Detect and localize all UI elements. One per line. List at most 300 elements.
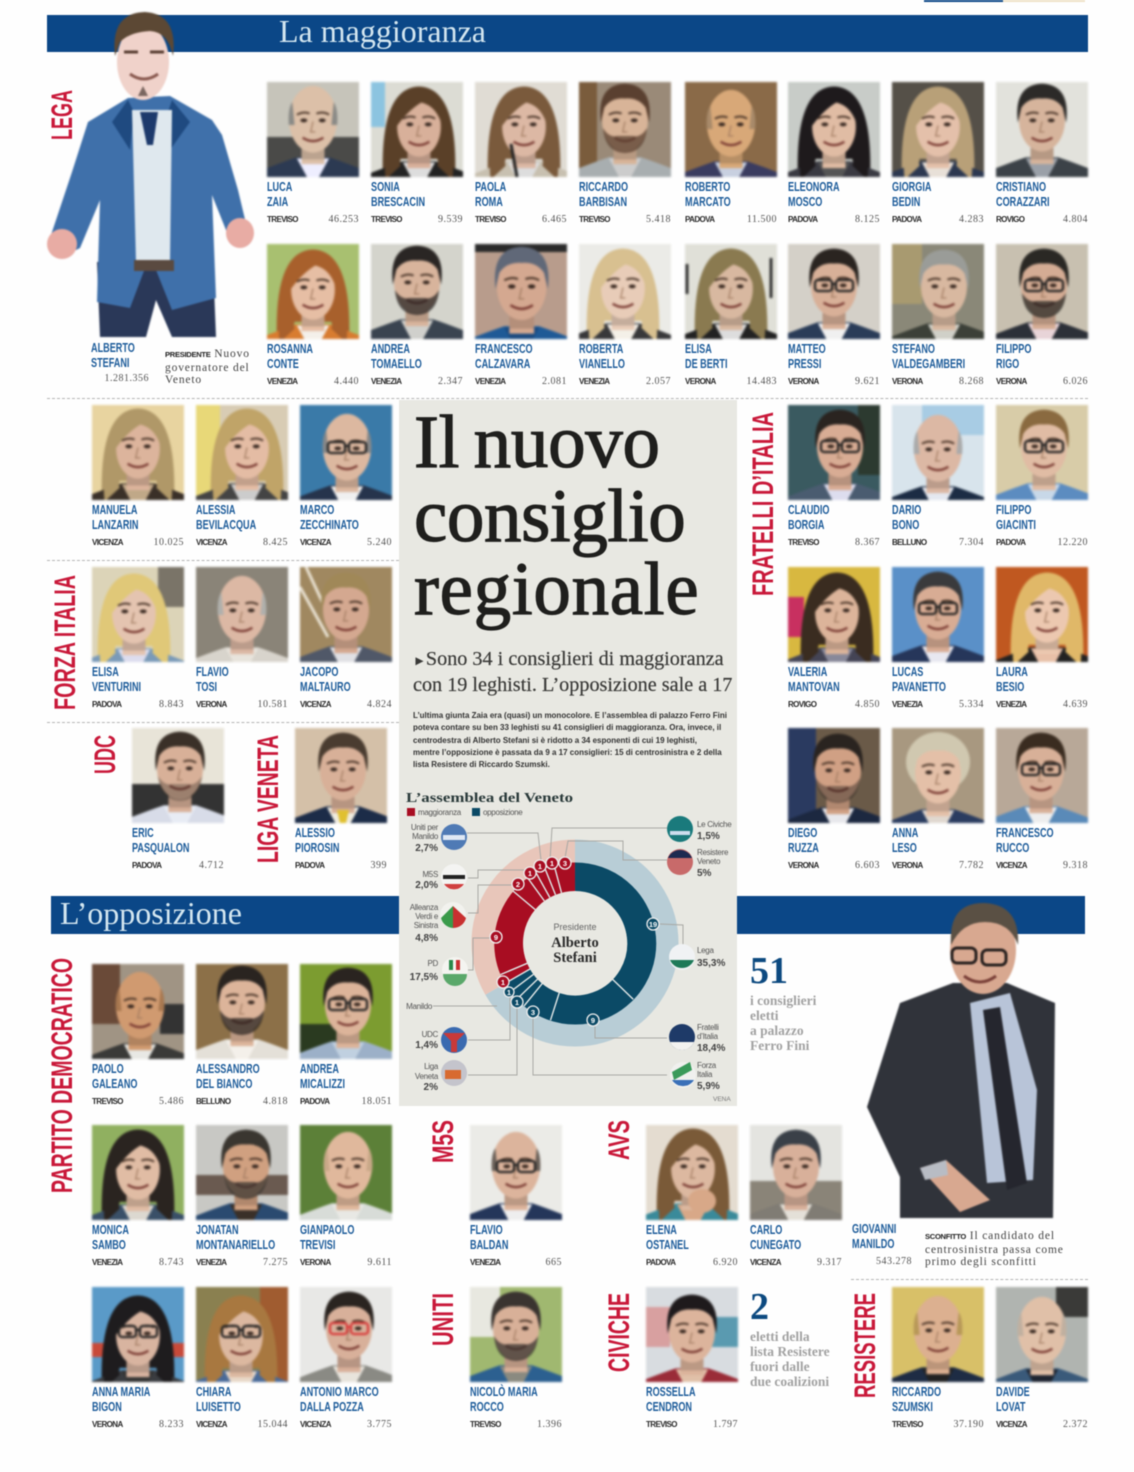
card: Lucas Pavanetto: LUCAS bbox=[892, 664, 923, 679]
callout text: Ferro Fini bbox=[750, 1038, 809, 1053]
card: Cristiano Corazzari: 4.804 bbox=[1063, 214, 1088, 225]
subtitle: ►Sono 34 i consiglieri di maggioranza bbox=[413, 648, 724, 670]
card: Jonatan Montanariello bbox=[196, 1125, 288, 1270]
header bar: La maggioranza bbox=[47, 15, 1088, 52]
card: Rossella Cendron: CENDRON bbox=[646, 1398, 692, 1414]
portrait bbox=[683, 80, 779, 179]
labels right: Resistere bbox=[697, 848, 729, 857]
party label: Resistere: RESISTERE bbox=[849, 1293, 882, 1398]
card: Gianpaolo Trevisi bbox=[300, 1125, 392, 1270]
card: Flavio Baldan: VENEZIA bbox=[470, 1258, 500, 1267]
labels right: Fratelli bbox=[697, 1023, 719, 1032]
chart: assemblea del Veneto: 19 bbox=[649, 920, 657, 929]
card: Alessio Piorosin: 399 bbox=[370, 860, 387, 871]
legend: maggioranza bbox=[418, 808, 462, 817]
labels left: 2% bbox=[424, 1082, 438, 1093]
card: Dario Bono: DARIO bbox=[892, 502, 921, 517]
card: Nicolò Maria Rocco: NICOLÒ MARIA bbox=[470, 1384, 538, 1399]
card: Diego Ruzza: RUZZA bbox=[788, 840, 819, 854]
card: Stefano Valdegamberi: VERONA bbox=[892, 377, 923, 386]
card: Roberto Marcato: MARCATO bbox=[685, 194, 731, 208]
chart: assemblea del Veneto: 1 bbox=[528, 869, 532, 878]
chart: assemblea del Veneto: 1 bbox=[550, 859, 554, 868]
Giovanni Manildo name block: MANILDO bbox=[852, 1236, 894, 1250]
card: Francesco Rucco: VICENZA bbox=[996, 861, 1027, 870]
caption: Stefani: PRESIDENTE Nuovo bbox=[165, 348, 250, 360]
card: Roberta Vianello: VIANELLO bbox=[579, 356, 625, 370]
card: Matteo Pressi: PRESSI bbox=[788, 356, 821, 370]
card: Laura Besio: LAURA bbox=[996, 664, 1028, 679]
card: Cristiano Corazzari: ROVIGO bbox=[996, 215, 1024, 224]
card: Dario Bono: 7.304 bbox=[959, 537, 984, 548]
card: Paola Roma: 6.465 bbox=[542, 214, 567, 225]
labels left: M5S bbox=[422, 870, 438, 879]
card: Elisa Venturini: VENTURINI bbox=[92, 678, 141, 694]
party label: Civiche: CIVICHE bbox=[603, 1293, 636, 1372]
card: Paola Roma: ROMA bbox=[475, 194, 503, 208]
card: Riccardo Szumski: SZUMSKI bbox=[892, 1398, 933, 1414]
card: Anna Maria Bigon bbox=[92, 1287, 184, 1432]
labels left: 17,5% bbox=[410, 972, 438, 983]
card: Francesco Rucco bbox=[996, 728, 1088, 873]
labels left: 2,7% bbox=[415, 843, 438, 854]
caption: Manildo: SCONFITTO Il candidato del bbox=[925, 1230, 1055, 1242]
card: Gianpaolo Trevisi: TREVISI bbox=[300, 1236, 335, 1252]
card: Anna Leso: ANNA bbox=[892, 825, 918, 840]
card: Antonio Marco Dalla Pozza: 3.775 bbox=[367, 1419, 392, 1430]
Giovanni Manildo name block: GIOVANNI bbox=[852, 1221, 896, 1236]
card: Elisa De Berti bbox=[683, 243, 779, 387]
card: Monica Sambo: SAMBO bbox=[92, 1236, 126, 1252]
card: Sonia Brescacin bbox=[369, 80, 465, 225]
card: Chiara Luisetto: 15.044 bbox=[258, 1419, 288, 1430]
labels right: Lega bbox=[697, 946, 714, 955]
Alberto Stefani name block: ALBERTO bbox=[91, 340, 135, 355]
chart: assemblea del Veneto: 3 bbox=[563, 859, 567, 868]
donut centre label: Stefani bbox=[553, 950, 597, 966]
card: Carlo Cunegato: VICENZA bbox=[750, 1258, 781, 1267]
labels right: Forza bbox=[697, 1061, 717, 1070]
card: Paola Roma: PAOLA bbox=[475, 179, 506, 194]
card: Roberta Vianello bbox=[577, 244, 673, 387]
card: Elisa De Berti: DE BERTI bbox=[685, 356, 727, 370]
card: Manuela Lanzarin: LANZARIN bbox=[92, 516, 139, 532]
intro text: centrodestra di Alberto Stefani si è ridotto a 34 esponenti di cui 19 leghisti, bbox=[413, 735, 697, 745]
card: Roberta Vianello: 2.057 bbox=[646, 376, 671, 387]
donut centre label: Presidente bbox=[553, 922, 597, 932]
party label: M5S: M5S bbox=[427, 1120, 460, 1163]
card: Filippo Giacinti: GIACINTI bbox=[996, 516, 1036, 532]
portrait bbox=[196, 1287, 288, 1382]
portrait bbox=[194, 403, 290, 502]
chart: assemblea del Veneto: 1 bbox=[507, 988, 511, 997]
portrait bbox=[646, 1125, 738, 1220]
card: Davide Lovat: DAVIDE bbox=[996, 1384, 1030, 1399]
leader lines bbox=[433, 828, 683, 1075]
portrait bbox=[473, 242, 569, 341]
party label: Partito Democratico: PARTITO DEMOCRATICO bbox=[46, 958, 79, 1193]
labels left bbox=[406, 823, 439, 1093]
card: Anna Leso bbox=[892, 728, 984, 873]
card: Antonio Marco Dalla Pozza bbox=[300, 1287, 392, 1432]
card: Alessio Piorosin: PIOROSIN bbox=[295, 840, 340, 854]
donut centre label bbox=[523, 891, 627, 995]
card: Riccardo Barbisan: BARBISAN bbox=[579, 194, 627, 208]
card: Lucas Pavanetto: VENEZIA bbox=[892, 700, 922, 709]
card: Monica Sambo: MONICA bbox=[92, 1222, 129, 1237]
card: Filippo Giacinti bbox=[996, 405, 1088, 550]
portrait bbox=[295, 728, 387, 823]
card: Anna Leso: 7.782 bbox=[959, 860, 984, 871]
intro text: L’ultima giunta Zaia era (quasi) un monocolore. E l’assemblea di palazzo Ferro Fini bbox=[413, 710, 727, 720]
card: Valeria Mantovan: VALERIA bbox=[788, 664, 827, 679]
card: Cristiano Corazzari: CORAZZARI bbox=[996, 194, 1050, 208]
card: Roberto Marcato: 11.500 bbox=[747, 214, 777, 225]
card: Nicolò Maria Rocco bbox=[470, 1287, 562, 1432]
card: Rosanna Conte: 4.440 bbox=[334, 376, 359, 387]
Alberto Stefani name block bbox=[91, 341, 151, 387]
card: Riccardo Barbisan bbox=[577, 80, 673, 225]
card: Riccardo Szumski: 37.190 bbox=[954, 1419, 984, 1430]
card: Riccardo Szumski: TREVISO bbox=[892, 1420, 923, 1429]
card: Jacopo Maltauro: JACOPO bbox=[300, 664, 338, 679]
card: Nicolò Maria Rocco: 1.396 bbox=[537, 1419, 562, 1430]
portrait bbox=[994, 242, 1090, 341]
card: Elisa Venturini bbox=[92, 567, 184, 712]
card: Cristiano Corazzari bbox=[994, 81, 1090, 225]
card: Eleonora Mosco: 8.125 bbox=[855, 214, 880, 225]
card: Jonatan Montanariello: JONATAN bbox=[196, 1222, 239, 1237]
portrait bbox=[300, 405, 392, 500]
title: regionale bbox=[414, 548, 699, 631]
card: Matteo Pressi: MATTEO bbox=[788, 341, 826, 356]
card: Lucas Pavanetto bbox=[892, 567, 984, 712]
card: Chiara Luisetto: VICENZA bbox=[196, 1420, 227, 1429]
card: Roberto Marcato: PADOVA bbox=[685, 215, 714, 224]
card: Jacopo Maltauro: MALTAURO bbox=[300, 678, 351, 694]
card: Rosanna Conte: CONTE bbox=[267, 356, 299, 370]
card: Carlo Cunegato: 9.317 bbox=[817, 1257, 842, 1268]
portrait bbox=[788, 405, 880, 500]
card: Paolo Galeano bbox=[92, 964, 184, 1109]
title: Il nuovo bbox=[414, 401, 660, 484]
card: Davide Lovat: 2.372 bbox=[1063, 1419, 1088, 1430]
header bar: L'opposizione bbox=[51, 896, 1085, 934]
Alberto Stefani name block: STEFANI bbox=[91, 354, 129, 370]
card: Elisa De Berti: 14.483 bbox=[746, 376, 777, 387]
card: Andrea Tomaello: TOMAELLO bbox=[371, 356, 422, 370]
card: Andrea Tomaello: VENEZIA bbox=[371, 377, 401, 386]
card: Andrea Tomaello: 2.347 bbox=[438, 376, 463, 387]
party label: Lega: LEGA bbox=[46, 90, 79, 140]
subtitle bbox=[412, 648, 732, 696]
card: Jacopo Maltauro: VICENZA bbox=[300, 700, 331, 709]
card: Roberto Marcato bbox=[683, 80, 779, 225]
card: Claudio Borgia: BORGIA bbox=[788, 516, 824, 532]
card: Roberto Marcato: ROBERTO bbox=[685, 179, 730, 194]
caption: Stefani bbox=[165, 348, 250, 387]
portrait bbox=[369, 242, 465, 341]
card: Giorgia Bedin bbox=[890, 80, 986, 225]
card: Filippo Rigo: RIGO bbox=[996, 356, 1019, 370]
callout: 2 bbox=[750, 1288, 845, 1390]
labels right: 5,9% bbox=[697, 1081, 720, 1092]
card: Filippo Giacinti: 12.220 bbox=[1058, 537, 1088, 548]
card: Marco Zecchinato: VICENZA bbox=[300, 538, 331, 547]
card: Alessia Bevilacqua: 8.425 bbox=[263, 537, 288, 548]
chart: assemblea del Veneto: 9 bbox=[494, 933, 498, 942]
subtitle: con 19 leghisti. L’opposizione sale a 17 bbox=[413, 674, 732, 696]
labels left: Liga bbox=[424, 1062, 439, 1071]
card: Giorgia Bedin: GIORGIA bbox=[892, 179, 931, 194]
card: Lucas Pavanetto: PAVANETTO bbox=[892, 678, 946, 694]
card: Paola Roma: TREVISO bbox=[475, 215, 506, 224]
card: Jacopo Maltauro: 4.824 bbox=[367, 699, 392, 710]
card: Valeria Mantovan: ROVIGO bbox=[788, 700, 816, 709]
card: Andrea Micalizzi: ANDREA bbox=[300, 1061, 339, 1076]
portrait bbox=[750, 1125, 842, 1220]
card: Alessio Piorosin: PADOVA bbox=[295, 861, 324, 870]
portrait bbox=[92, 1287, 184, 1382]
number: 2 bbox=[750, 1286, 769, 1328]
card: Flavio Tosi: FLAVIO bbox=[196, 664, 229, 679]
caption: Stefani: governatore del bbox=[165, 362, 250, 374]
cutout: Alberto Stefani bbox=[47, 12, 254, 337]
labels left: Verdi e bbox=[415, 912, 439, 921]
card: Flavio Baldan: 665 bbox=[546, 1257, 562, 1268]
card: Elisa De Berti: ELISA bbox=[685, 341, 712, 356]
portrait bbox=[300, 964, 392, 1059]
card: Luca Zaia: LUCA bbox=[267, 179, 292, 194]
caption: Manildo: primo degli sconfitti bbox=[925, 1256, 1037, 1268]
card: Rossella Cendron: ROSSELLA bbox=[646, 1384, 696, 1399]
card: Stefano Valdegamberi: 8.268 bbox=[959, 376, 984, 387]
callout text: eletti bbox=[750, 1008, 778, 1023]
card: Riccardo Szumski bbox=[892, 1287, 984, 1432]
caption: Manildo: centrosinistra passa come bbox=[925, 1244, 1064, 1256]
card: Elena Ostanel: OSTANEL bbox=[646, 1236, 689, 1252]
card: Claudio Borgia: CLAUDIO bbox=[788, 502, 829, 517]
card: Marco Zecchinato bbox=[298, 403, 394, 548]
card: Eric Pasqualon: PASQUALON bbox=[132, 840, 189, 854]
party label: Uniti: UNITI bbox=[427, 1293, 460, 1346]
card: Alessandro Del Bianco: 4.818 bbox=[263, 1096, 288, 1107]
card: Francesco Calzavara: VENEZIA bbox=[475, 377, 505, 386]
portrait bbox=[788, 728, 880, 823]
card: Giorgia Bedin: PADOVA bbox=[892, 215, 921, 224]
labels left: 1,4% bbox=[415, 1040, 438, 1051]
card: Gianpaolo Trevisi: 9.611 bbox=[367, 1257, 392, 1268]
card: Manuela Lanzarin: 10.025 bbox=[154, 537, 184, 548]
chart: assemblea del Veneto bbox=[406, 791, 732, 1103]
card: Alessia Bevilacqua: ALESSIA bbox=[196, 502, 235, 517]
card: Chiara Luisetto: CHIARA bbox=[196, 1384, 231, 1399]
labels left: Manildo bbox=[406, 1002, 433, 1011]
card: Alessia Bevilacqua: BEVILACQUA bbox=[196, 516, 256, 532]
card: Manuela Lanzarin bbox=[90, 404, 186, 548]
party label: Forza Italia: FORZA ITALIA bbox=[49, 575, 82, 710]
card: Alessia Bevilacqua bbox=[194, 403, 290, 548]
card: Matteo Pressi: 9.621 bbox=[855, 376, 880, 387]
card: Flavio Baldan bbox=[470, 1125, 562, 1270]
portrait bbox=[996, 1287, 1088, 1382]
card: Alessandro Del Bianco: ALESSANDRO bbox=[196, 1061, 260, 1076]
card: Andrea Tomaello: ANDREA bbox=[371, 341, 410, 356]
card: Dario Bono: BONO bbox=[892, 516, 919, 532]
callout text bbox=[750, 993, 816, 1053]
portrait bbox=[196, 964, 288, 1059]
portrait bbox=[300, 567, 392, 662]
card: Sonia Brescacin: 9.539 bbox=[438, 214, 463, 225]
labels right bbox=[697, 820, 732, 1103]
labels left: Sinistra bbox=[414, 921, 439, 930]
card: Diego Ruzza: DIEGO bbox=[788, 825, 817, 840]
card: Eric Pasqualon: 4.712 bbox=[199, 860, 224, 871]
card: Eric Pasqualon: ERIC bbox=[132, 825, 154, 840]
portrait bbox=[577, 80, 673, 178]
portrait bbox=[92, 567, 184, 662]
labels left: 2,0% bbox=[415, 880, 438, 891]
callout text: fuori dalle bbox=[750, 1359, 810, 1374]
card: Flavio Tosi: VERONA bbox=[196, 700, 227, 709]
card: Francesco Rucco: 9.318 bbox=[1063, 860, 1088, 871]
card: Gianpaolo Trevisi: VERONA bbox=[300, 1258, 331, 1267]
card: Andrea Micalizzi: PADOVA bbox=[300, 1097, 329, 1106]
cutout: Giovanni Manildo bbox=[867, 903, 1055, 1218]
party label: UDC: UDC bbox=[89, 735, 122, 774]
labels right: Italia bbox=[697, 1070, 713, 1079]
donut centre label: Alberto bbox=[551, 935, 599, 951]
card: Carlo Cunegato bbox=[750, 1125, 842, 1270]
card: Matteo Pressi: VERONA bbox=[788, 377, 819, 386]
card: Alessio Piorosin bbox=[295, 728, 387, 873]
card: Francesco Calzavara bbox=[473, 242, 569, 387]
card: Francesco Calzavara: CALZAVARA bbox=[475, 356, 530, 370]
portrait bbox=[577, 244, 673, 341]
portrait bbox=[470, 1287, 562, 1382]
card: Monica Sambo: 8.743 bbox=[159, 1257, 184, 1268]
card: Elisa Venturini: 8.843 bbox=[159, 699, 184, 710]
card: Sonia Brescacin: SONIA bbox=[371, 179, 400, 194]
card: Flavio Baldan: BALDAN bbox=[470, 1236, 508, 1252]
portrait bbox=[92, 1125, 184, 1220]
card: Riccardo Barbisan: 5.418 bbox=[646, 214, 671, 225]
header bar: La maggioranza: La maggioranza bbox=[279, 13, 486, 49]
callout text: due coalizioni bbox=[750, 1374, 829, 1389]
card: Filippo Rigo: 6.026 bbox=[1063, 376, 1088, 387]
party label: Liga Veneta: LIGA VENETA bbox=[252, 735, 285, 863]
card: Filippo Giacinti: PADOVA bbox=[996, 538, 1025, 547]
card: Luca Zaia: ZAIA bbox=[267, 194, 288, 208]
card: Dario Bono bbox=[892, 405, 984, 550]
card: Paolo Galeano: PAOLO bbox=[92, 1061, 124, 1076]
panel: central title block bbox=[399, 400, 737, 1106]
card: Diego Ruzza: VERONA bbox=[788, 861, 819, 870]
card: Filippo Rigo: FILIPPO bbox=[996, 341, 1031, 356]
legend: opposizione bbox=[483, 808, 523, 817]
card: Andrea Micalizzi: 18.051 bbox=[362, 1096, 392, 1107]
caption: Manildo bbox=[925, 1230, 1064, 1269]
card: Flavio Tosi bbox=[196, 567, 288, 712]
top strip bbox=[924, 0, 1003, 2]
portrait bbox=[994, 81, 1090, 179]
portrait bbox=[890, 242, 986, 341]
card: Claudio Borgia: 8.367 bbox=[855, 537, 880, 548]
card: Claudio Borgia: TREVISO bbox=[788, 538, 819, 547]
card: Luca Zaia bbox=[265, 80, 361, 225]
card: Andrea Micalizzi bbox=[300, 964, 392, 1109]
callout text bbox=[750, 1329, 830, 1389]
card: Filippo Giacinti: FILIPPO bbox=[996, 502, 1031, 517]
portrait bbox=[892, 1287, 984, 1382]
card: Valeria Mantovan: 4.850 bbox=[855, 699, 880, 710]
callout: 51 bbox=[750, 952, 840, 1057]
portrait bbox=[892, 405, 984, 500]
chart: assemblea del Veneto: 1 bbox=[515, 998, 519, 1007]
portrait bbox=[890, 80, 986, 179]
card: Matteo Pressi bbox=[786, 242, 882, 387]
portrait bbox=[788, 567, 880, 662]
card: Antonio Marco Dalla Pozza: DALLA POZZA bbox=[300, 1398, 364, 1414]
card: Elisa Venturini: PADOVA bbox=[92, 700, 121, 709]
card: Flavio Tosi: TOSI bbox=[196, 678, 217, 694]
portrait bbox=[786, 80, 882, 179]
portrait bbox=[892, 728, 984, 823]
callout text: i consiglieri bbox=[750, 993, 816, 1008]
portrait bbox=[196, 567, 288, 662]
labels left: Manildo bbox=[412, 832, 439, 841]
card: Elena Ostanel: 6.920 bbox=[713, 1257, 738, 1268]
card: Stefano Valdegamberi: STEFANO bbox=[892, 341, 935, 356]
chart: assemblea del Veneto: 1 bbox=[538, 862, 542, 871]
labels right: 1,5% bbox=[697, 831, 720, 842]
portrait bbox=[196, 1125, 288, 1220]
card: Rossella Cendron: TREVISO bbox=[646, 1420, 677, 1429]
card: Riccardo Barbisan: TREVISO bbox=[579, 215, 610, 224]
card: Carlo Cunegato: CARLO bbox=[750, 1222, 782, 1237]
portrait bbox=[470, 1125, 562, 1220]
card: Davide Lovat bbox=[996, 1287, 1088, 1432]
number: 51 bbox=[750, 950, 788, 992]
card: Anna Maria Bigon: VERONA bbox=[92, 1420, 123, 1429]
card: Carlo Cunegato: CUNEGATO bbox=[750, 1236, 801, 1252]
card: Sonia Brescacin: TREVISO bbox=[371, 215, 402, 224]
card: Anna Maria Bigon: BIGON bbox=[92, 1398, 122, 1414]
card: Jacopo Maltauro bbox=[300, 567, 392, 712]
card: Sonia Brescacin: BRESCACIN bbox=[371, 194, 425, 208]
portrait bbox=[996, 567, 1088, 662]
card: Monica Sambo: VENEZIA bbox=[92, 1258, 122, 1267]
card: Antonio Marco Dalla Pozza: VICENZA bbox=[300, 1420, 331, 1429]
card: Filippo Rigo: VERONA bbox=[996, 377, 1027, 386]
card: Chiara Luisetto: LUISETTO bbox=[196, 1398, 241, 1414]
card: Eleonora Mosco: ELEONORA bbox=[788, 179, 840, 194]
card: Laura Besio: 4.639 bbox=[1063, 699, 1088, 710]
card: Paolo Galeano: TREVISO bbox=[92, 1097, 123, 1106]
card: Laura Besio: BESIO bbox=[996, 678, 1024, 694]
card: Francesco Calzavara: FRANCESCO bbox=[475, 341, 533, 356]
labels left: Uniti per bbox=[411, 823, 439, 832]
labels right: 5% bbox=[697, 868, 712, 879]
chart: assemblea del Veneto: 2 bbox=[516, 880, 520, 889]
card: Anna Maria Bigon: ANNA MARIA bbox=[92, 1384, 150, 1399]
card: Diego Ruzza: 6.603 bbox=[855, 860, 880, 871]
card: Luca Zaia: TREVISO bbox=[267, 215, 298, 224]
card: Rosanna Conte bbox=[265, 242, 361, 387]
card: Laura Besio bbox=[996, 567, 1088, 712]
card: Francesco Calzavara: 2.081 bbox=[542, 376, 567, 387]
card: Claudio Borgia bbox=[788, 405, 880, 550]
